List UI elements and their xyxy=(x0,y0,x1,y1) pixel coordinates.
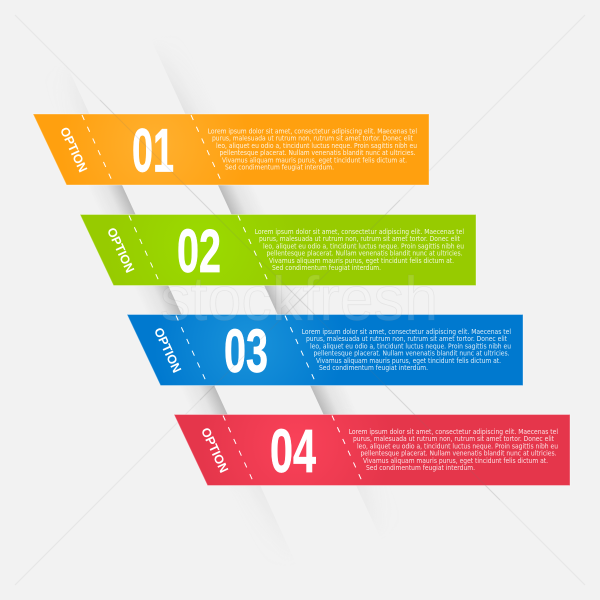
option label: OPTION xyxy=(151,326,184,375)
description text: pellentesque placerat. Nullam venenatis blandit nunc at ultricies. xyxy=(360,450,556,458)
dashed stitch right xyxy=(332,416,364,486)
description text: purus, malesuada ut rutrum non, rutrum sit amet tortor. Donec elit xyxy=(212,135,413,143)
description text: leo, aliquet eu odio a, tincidunt luctus neque. Proin sagittis nibh eu xyxy=(263,242,464,250)
description text: Lorem ipsum dolor sit amet, consectetur adipiscing elit. Maecenas tel xyxy=(208,127,417,135)
panel: option 03 blue band xyxy=(127,314,523,386)
description text: Sed condimentum feugiat interdum. xyxy=(366,464,475,472)
panel: option 02 green band xyxy=(80,214,476,286)
dashed stitch left xyxy=(129,216,161,286)
band shape xyxy=(33,114,429,185)
description text: purus, malesuada ut rutrum non, rutrum sit amet tortor. Donec elit xyxy=(259,235,460,243)
crease lines over bands xyxy=(100,100,500,500)
description text: Sed condimentum feugiat interdum. xyxy=(319,364,428,372)
description text xyxy=(349,428,558,472)
description text xyxy=(208,127,417,172)
description text: pellentesque placerat. Nullam venenatis blandit nunc at ultricies. xyxy=(314,350,510,358)
description text: Lorem ipsum dolor sit amet, consectetur adipiscing elit. Maecenas tel xyxy=(349,428,558,436)
right fold shadow xyxy=(170,78,346,414)
description text: Lorem ipsum dolor sit amet, consectetur adipiscing elit. Maecenas tel xyxy=(302,328,511,336)
number 04: 04 xyxy=(270,417,316,485)
dashed stitch right xyxy=(238,216,270,286)
description text: purus, malesuada ut rutrum non, rutrum sit amet tortor. Donec elit xyxy=(353,435,554,443)
number 02: 02 xyxy=(177,217,221,285)
band shape xyxy=(127,314,523,386)
option label: OPTION xyxy=(57,125,90,174)
description text: leo, aliquet eu odio a, tincidunt luctus neque. Proin sagittis nibh eu xyxy=(310,342,511,350)
dashed stitch left xyxy=(82,115,114,185)
description text: pellentesque placerat. Nullam venenatis blandit nunc at ultricies. xyxy=(266,250,462,258)
description text: Sed condimentum feugiat interdum. xyxy=(272,264,381,272)
description text xyxy=(255,228,464,272)
left fold shadow xyxy=(84,104,262,490)
option label: OPTION xyxy=(198,426,231,475)
description text xyxy=(302,328,511,372)
description text: Vivamus aliquam mauris purus, eget tincidunt felis dictum at. xyxy=(222,156,407,164)
description text: purus, malesuada ut rutrum non, rutrum sit amet tortor. Donec elit xyxy=(306,335,507,343)
description text: Lorem ipsum dolor sit amet, consectetur adipiscing elit. Maecenas tel xyxy=(255,228,464,236)
description text: Vivamus aliquam mauris purus, eget tincidunt felis dictum at. xyxy=(363,457,548,465)
description text: Sed condimentum feugiat interdum. xyxy=(225,164,334,172)
band shape xyxy=(174,414,570,486)
description text: Vivamus aliquam mauris purus, eget tincidunt felis dictum at. xyxy=(269,257,454,265)
band shape xyxy=(80,214,476,286)
watermark: stockfresh xyxy=(160,265,438,334)
number 01: 01 xyxy=(132,116,174,184)
description text: Vivamus aliquam mauris purus, eget tincidunt felis dictum at. xyxy=(316,357,501,365)
description text: pellentesque placerat. Nullam venenatis blandit nunc at ultricies. xyxy=(220,149,416,157)
description text: leo, aliquet eu odio a, tincidunt luctus neque. Proin sagittis nibh eu xyxy=(357,442,558,450)
panel: option 04 red band xyxy=(174,414,570,486)
dashed stitch right xyxy=(191,115,223,185)
option label: OPTION xyxy=(104,226,137,275)
dashed stitch right xyxy=(285,316,317,386)
number 03: 03 xyxy=(224,317,268,385)
description text: leo, aliquet eu odio a, tincidunt luctus neque. Proin sagittis nibh eu xyxy=(216,142,417,150)
panel: option 01 orange band xyxy=(33,114,429,185)
dashed stitch left xyxy=(176,316,208,386)
dashed stitch left xyxy=(223,416,255,486)
